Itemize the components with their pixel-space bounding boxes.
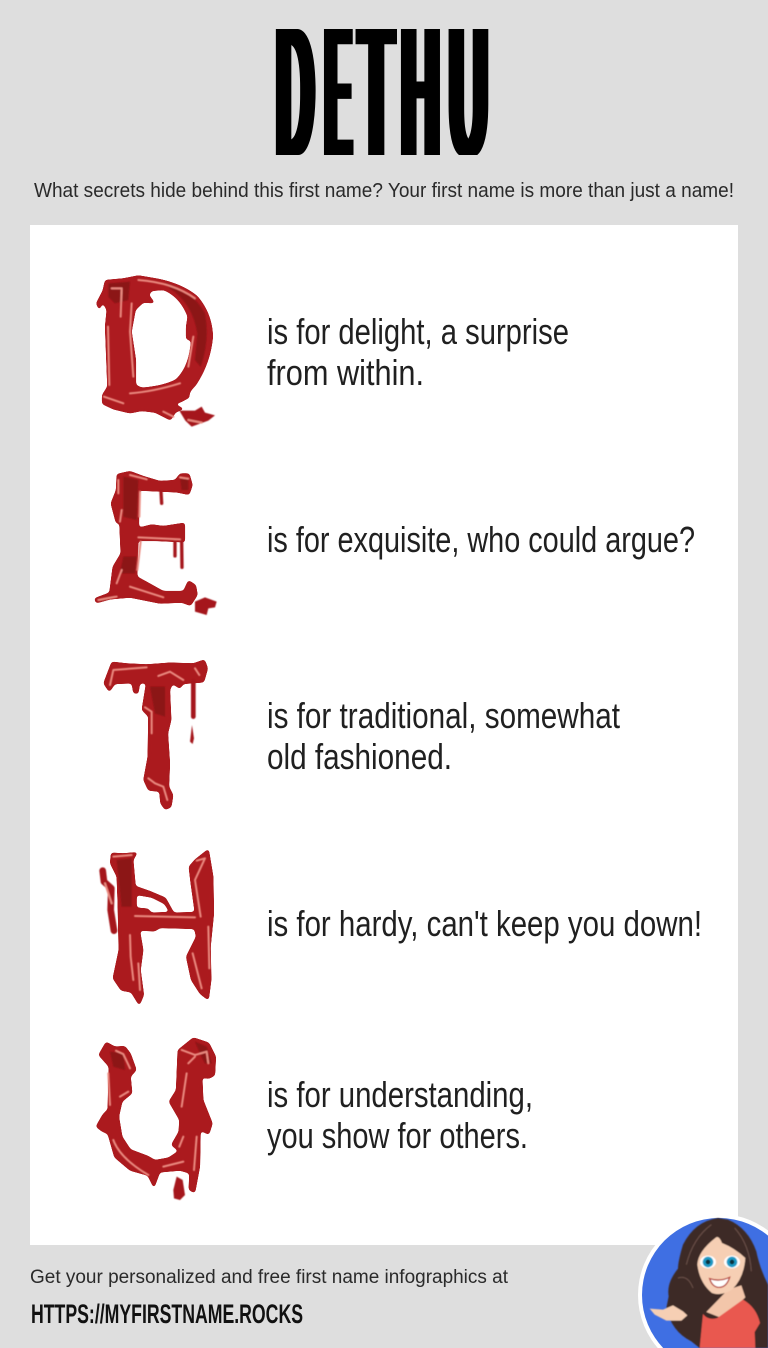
text: U meaning: [267, 1074, 533, 1156]
panel: letter meanings: [30, 225, 738, 1245]
text: T meaning: [267, 695, 620, 777]
title: [276, 29, 488, 155]
text: D meaning: from within.: [267, 352, 424, 393]
icon: avatar woman: [638, 1214, 768, 1348]
icon: blood letter H: [103, 849, 214, 1006]
icon: blood letter T: [103, 659, 208, 810]
icon: blood letter U: [96, 1037, 216, 1200]
icon: blood letter D: [96, 275, 215, 427]
text: D meaning: is for delight, a surprise: [267, 311, 569, 352]
text: T meaning: is for traditional, somewhat: [267, 695, 620, 736]
subtitle: What secrets hide behind this first name? Your first name is more than just a name!: [34, 180, 734, 202]
text: T meaning: old fashioned.: [267, 736, 452, 777]
text: D meaning: [267, 311, 569, 393]
footer call to action: Get your personalized and free first name infographics at: [30, 1267, 509, 1288]
footer url: HTTPS://MYFIRSTNAME.ROCKS: [31, 1299, 303, 1329]
text: U meaning: you show for others.: [267, 1115, 528, 1156]
icon: blood letter E: [94, 471, 217, 615]
text: U meaning: is for understanding,: [267, 1074, 533, 1115]
